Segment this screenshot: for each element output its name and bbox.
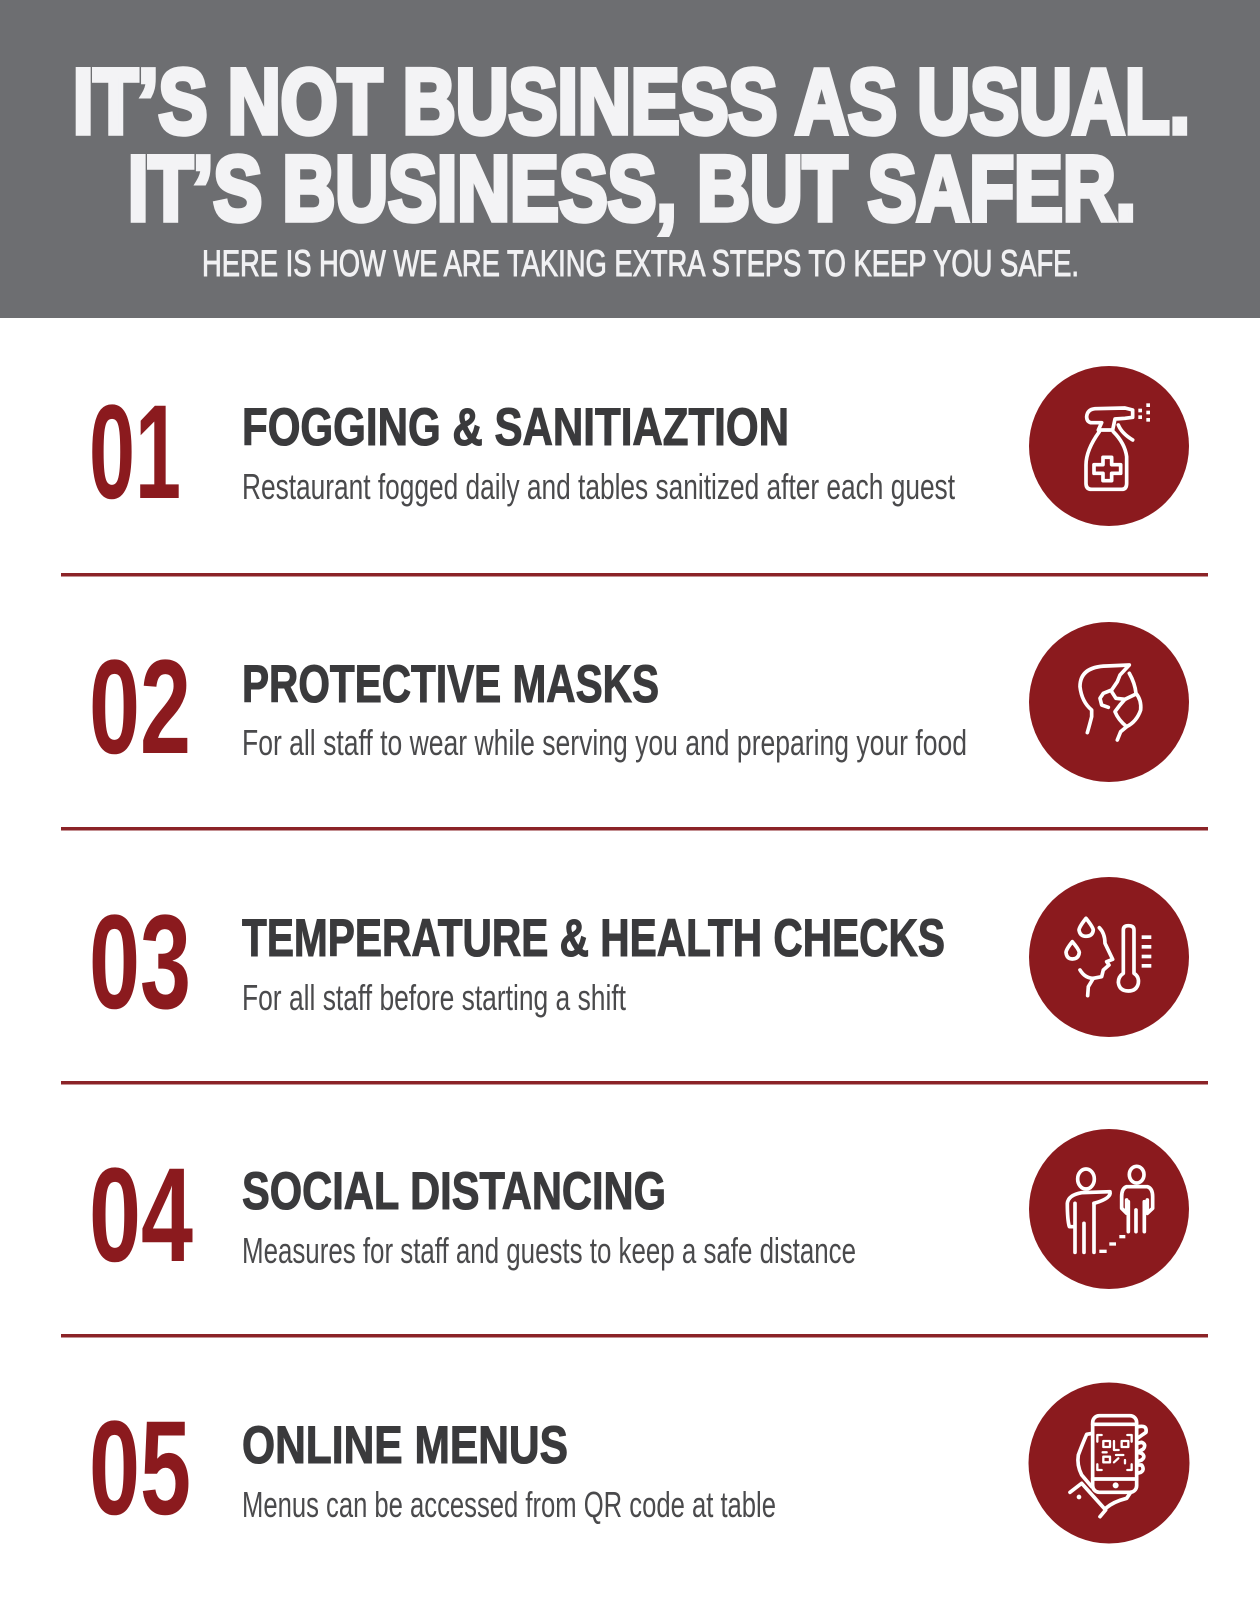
icon: two people distancing <box>1029 1129 1189 1289</box>
description 04: Measures for staff and guests to keep a safe distance <box>242 1230 856 1271</box>
divider 4 <box>61 1334 1208 1338</box>
icon: spray bottle <box>1029 366 1189 526</box>
heading 03: TEMPERATURE & HEALTH CHECKS <box>242 909 945 968</box>
heading 04: SOCIAL DISTANCING <box>242 1162 666 1221</box>
icon: hand holding phone with QR code <box>1028 1382 1190 1544</box>
row 5: online menus <box>89 1382 1190 1544</box>
row 3: temperature and health checks <box>89 877 1189 1037</box>
row 4: social distancing <box>89 1129 1189 1290</box>
number 04: 04 <box>89 1141 193 1290</box>
description 03: For all staff before starting a shift <box>242 977 626 1018</box>
number 02: 02 <box>89 633 191 782</box>
number 01: 01 <box>89 378 181 527</box>
number 05: 05 <box>89 1394 191 1543</box>
row 2: protective masks <box>89 622 1189 782</box>
icon: face, droplets and thermometer <box>1029 877 1189 1037</box>
row 1: fogging and sanitization <box>89 366 1189 527</box>
heading 02: PROTECTIVE MASKS <box>242 655 659 714</box>
heading 01: FOGGING & SANITIAZTION <box>242 398 789 457</box>
divider 2 <box>61 827 1208 830</box>
header banner <box>0 0 1260 318</box>
description 05: Menus can be accessed from QR code at table <box>242 1484 776 1525</box>
description 02: For all staff to wear while serving you and preparing your food <box>242 722 967 763</box>
divider 3 <box>61 1081 1208 1084</box>
description 01: Restaurant fogged daily and tables sanitized after each guest <box>242 466 955 507</box>
divider 1 <box>61 573 1208 576</box>
number 03: 03 <box>89 888 191 1037</box>
heading 05: ONLINE MENUS <box>242 1416 568 1475</box>
icon: masked head <box>1029 622 1189 782</box>
